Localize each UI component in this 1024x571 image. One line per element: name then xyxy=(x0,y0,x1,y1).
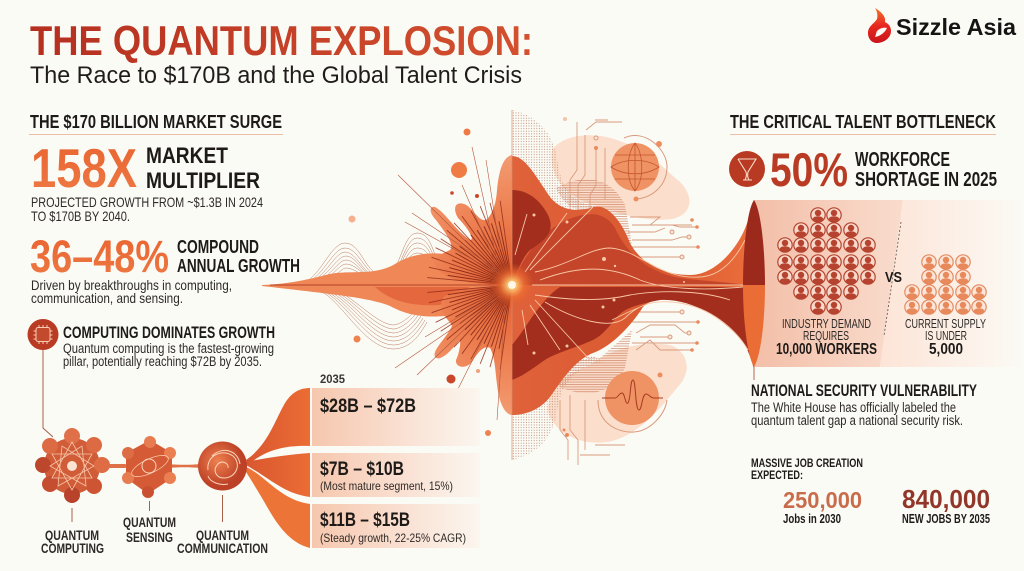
icon: processor chip xyxy=(28,319,58,350)
funnel mouth xyxy=(743,200,765,380)
stat: 840,000 new jobs by 2035: NEW JOBS BY 2035 xyxy=(902,512,990,526)
floating particles xyxy=(348,117,567,436)
text: industry demand xyxy=(776,316,877,358)
stat: 36-48% compound annual growth: ANNUAL GROWTH xyxy=(177,256,300,276)
label: quantum computing xyxy=(41,508,104,556)
text: current supply: CURRENT SUPPLY xyxy=(905,316,986,331)
text: projected growth: PROJECTED GROWTH FROM ~$1.3B IN 2024 xyxy=(31,194,263,210)
stat: 50% workforce shortage: WORKFORCE xyxy=(855,149,950,171)
text: driven by breakthroughs: Driven by breakthroughs in computing, xyxy=(31,277,232,293)
text: computing dominates growth: Quantum computing is the fastest-growing xyxy=(63,341,274,356)
connector line: chip to quantum computing xyxy=(43,350,53,437)
rays: dense dark burst xyxy=(427,201,512,369)
people grid: current supply xyxy=(905,255,986,314)
band: quantum communication value xyxy=(312,504,480,548)
left wave lines xyxy=(300,233,436,349)
people grid: industry demand xyxy=(778,208,875,314)
stat: 840,000 new jobs by 2035: 840,000 xyxy=(902,484,990,514)
panel: demand vs supply xyxy=(743,200,1024,380)
text: projected growth: TO $170B BY 2040. xyxy=(31,208,130,224)
stat: 158X market multiplier: 158X xyxy=(31,137,137,199)
text: national security vulnerability xyxy=(751,381,977,428)
icon: quantum sensing molecule xyxy=(122,436,176,498)
text: industry demand: REQUIRES xyxy=(803,328,849,343)
center glow xyxy=(490,263,534,307)
label: quantum sensing: QUANTUM xyxy=(123,514,176,530)
stat: 36-48% compound annual growth: 36–48% xyxy=(30,231,169,282)
icon: quantum computing molecule xyxy=(35,428,110,503)
band: quantum communication value: (Steady growth, 22-25% CAGR) xyxy=(320,531,466,545)
band: quantum sensing value: $7B – $10B xyxy=(320,459,404,480)
center vertical divider xyxy=(511,110,513,460)
panel: market bands 2035: 2035 xyxy=(320,372,345,386)
label: quantum sensing: SENSING xyxy=(126,529,173,545)
text: driven by breakthroughs xyxy=(31,277,232,306)
peach background blobs xyxy=(548,135,689,443)
heading: market surge: THE $170 BILLION MARKET SURGE xyxy=(30,112,282,132)
right outer shape xyxy=(512,156,754,415)
text: computing dominates growth: COMPUTING DOMINATES GROWTH xyxy=(63,323,275,342)
text: current supply: 5,000 xyxy=(929,341,963,358)
halftone fans xyxy=(512,110,632,460)
label: VS: VS xyxy=(885,269,902,286)
title: The Race to $170B and the Global Talent Crisis xyxy=(30,62,522,89)
small sparks xyxy=(532,214,685,354)
icon: globe xyxy=(611,135,667,202)
icon: funnel glass xyxy=(729,151,765,187)
circuit end nodes xyxy=(562,136,700,437)
text: national security vulnerability: quantum talent gap a national security risk. xyxy=(751,413,963,428)
band: quantum sensing value: (Most mature segment, 15%) xyxy=(320,479,453,493)
band: quantum sensing value xyxy=(312,453,480,497)
stat: 840,000 new jobs by 2035 xyxy=(902,484,990,526)
text: massive job creation: EXPECTED: xyxy=(751,468,803,482)
rays: short inner burst xyxy=(448,221,512,349)
label: quantum communication: QUANTUM xyxy=(196,527,249,543)
label: quantum computing: COMPUTING xyxy=(41,540,104,556)
text: projected growth xyxy=(31,194,263,224)
stat: 158X market multiplier: MARKET xyxy=(146,143,228,168)
flow streams to market bands xyxy=(246,388,310,548)
panel: market surge xyxy=(29,112,300,306)
circuit traces xyxy=(560,120,698,465)
label: quantum computing: QUANTUM xyxy=(45,527,99,543)
stat: 250,000 jobs in 2030: Jobs in 2030 xyxy=(783,512,841,526)
label: quantum communication: COMMUNICATION xyxy=(177,540,268,556)
central artwork: quantum explosion xyxy=(262,110,754,465)
left burst petals xyxy=(431,155,512,415)
title: THE QUANTUM EXPLOSION: xyxy=(30,17,533,64)
stat: 250,000 jobs in 2030: 250,000 xyxy=(783,487,862,513)
icon: signal wave circle xyxy=(598,371,667,432)
left orange body xyxy=(262,253,512,317)
stat: 158X market multiplier: MULTIPLIER xyxy=(146,168,260,193)
stat: 36-48% compound annual growth xyxy=(30,231,300,282)
axis line xyxy=(270,284,512,286)
logo: Sizzle Asia xyxy=(868,8,1016,43)
text: massive job creation xyxy=(751,456,863,482)
right mid red layer xyxy=(512,214,745,285)
text: current supply: IS UNDER xyxy=(925,328,967,343)
flowing lines in funnel xyxy=(515,207,752,360)
stat: 250,000 jobs in 2030 xyxy=(783,487,862,526)
text: industry demand: INDUSTRY DEMAND xyxy=(782,316,871,331)
band: quantum communication value: $11B – $15B xyxy=(320,510,410,531)
text: national security vulnerability: The White House has officially labeled the xyxy=(751,400,956,415)
right dark lobes xyxy=(512,190,754,380)
stat: 50% workforce shortage xyxy=(770,143,997,196)
logo: Sizzle Asia: Sizzle Asia xyxy=(896,14,1016,40)
stat: 36-48% compound annual growth: COMPOUND xyxy=(177,237,259,257)
label: quantum communication xyxy=(177,495,268,556)
icon: quantum communication swirl xyxy=(198,442,247,490)
title xyxy=(30,17,533,89)
text: industry demand: 10,000 WORKERS xyxy=(776,341,877,358)
text: computing dominates growth: pillar, potentially reaching $72B by 2035. xyxy=(63,354,262,369)
stat: 50% workforce shortage: 50% xyxy=(770,143,848,196)
text: massive job creation: MASSIVE JOB CREATION xyxy=(751,456,863,470)
band: quantum computing value: $28B – $72B xyxy=(320,396,416,417)
stat: 158X market multiplier xyxy=(31,137,260,199)
label: quantum sensing xyxy=(123,501,176,545)
text: current supply xyxy=(905,316,986,358)
text: computing dominates growth xyxy=(63,323,275,369)
rays: long thin xyxy=(395,147,505,425)
text: driven by breakthroughs: communication, and sensing. xyxy=(31,290,183,306)
connectors between molecules xyxy=(100,464,200,468)
panel: market bands 2035 xyxy=(312,372,480,548)
band: quantum computing value xyxy=(312,388,480,446)
